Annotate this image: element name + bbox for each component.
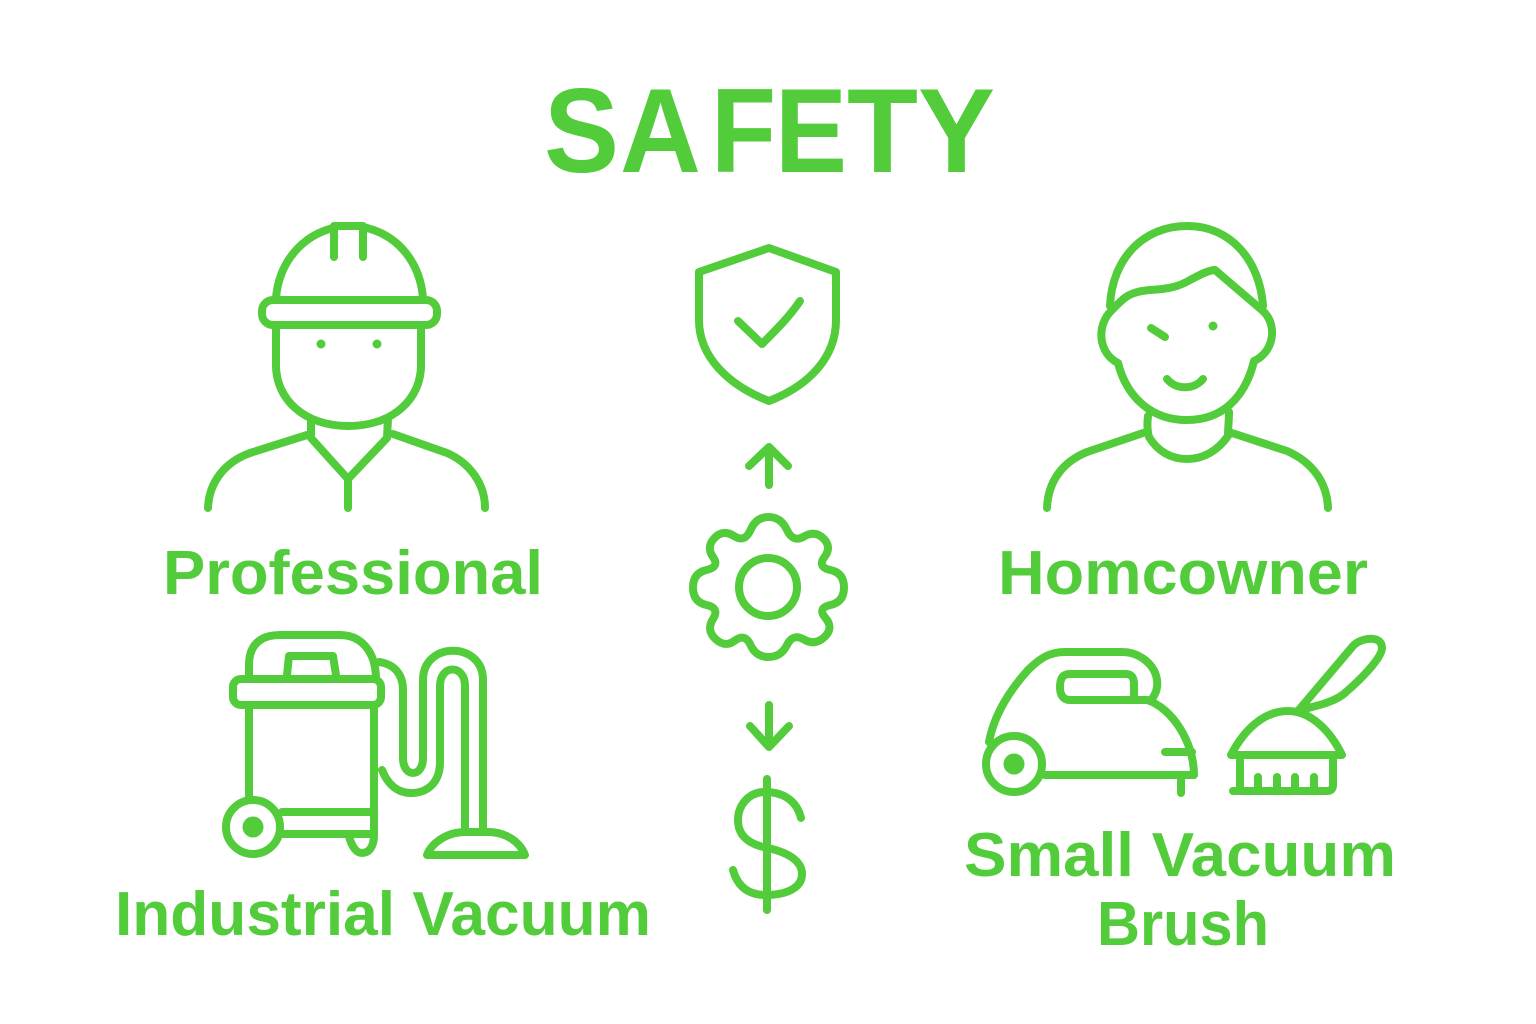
- label: Homeowner: Homcowner: [998, 539, 1368, 608]
- arrow: down: [750, 705, 789, 747]
- icon: homeowner: [1047, 226, 1328, 508]
- label: Small Vacuum Brush: Brush: [1097, 890, 1269, 959]
- title: T: [847, 64, 918, 198]
- label: Professional: Professional: [163, 539, 543, 608]
- icon: professional worker: [208, 226, 485, 508]
- title: S: [544, 64, 619, 198]
- icon: gear: [693, 517, 844, 657]
- icon: industrial vacuum: [226, 635, 525, 855]
- arrow: up: [749, 447, 788, 485]
- title: F: [711, 64, 776, 198]
- title: A: [620, 64, 701, 198]
- title: Y: [918, 64, 995, 198]
- icon: dollar sign: [733, 779, 802, 910]
- icon: small vacuum: [986, 652, 1194, 793]
- label: Small Vacuum Brush: Small Vacuum: [964, 821, 1396, 890]
- icon: brush: [1231, 639, 1382, 791]
- label: Industrial Vacuum: Industrial Vacuum: [115, 880, 651, 949]
- title: E: [775, 64, 847, 198]
- icon: shield with check: [699, 248, 836, 401]
